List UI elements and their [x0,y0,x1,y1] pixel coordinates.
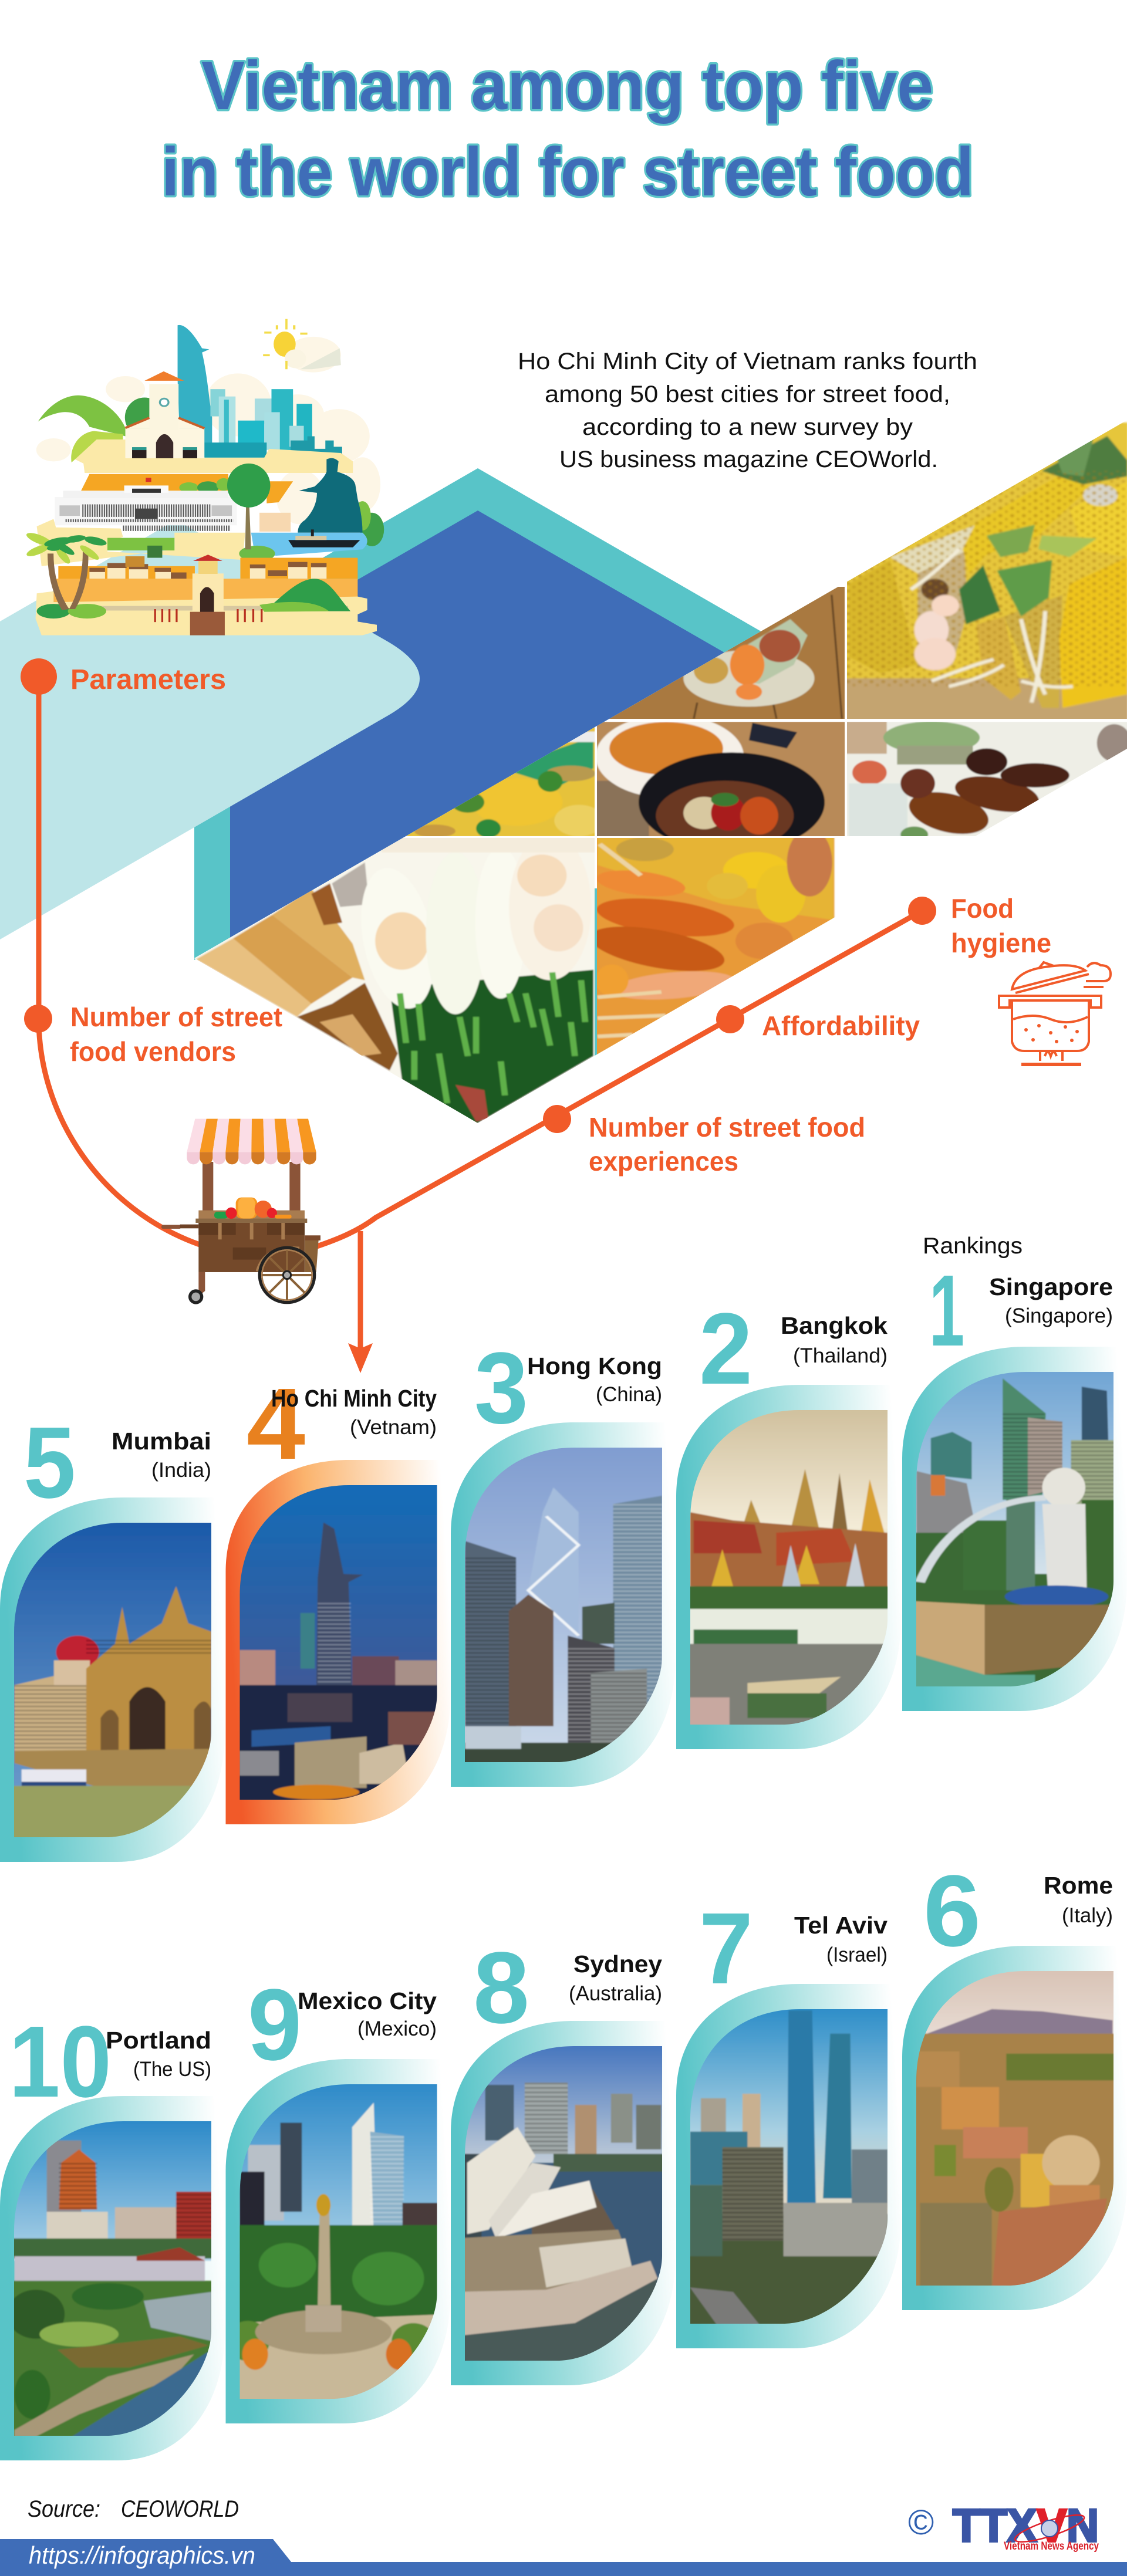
photo: spring rolls on plate [609,587,845,719]
background geometric panel [0,468,763,960]
label: Bangkok [781,1312,888,1339]
label [527,1353,662,1406]
frame and photo [225,2059,451,2423]
logo TTXVN [908,2499,1099,2553]
label: (Mexico) [357,2017,437,2040]
parameter: food hygiene: hygiene [951,928,1051,958]
photo: roast duck [845,721,1127,843]
frame and photo [225,1460,451,1824]
photo: banh xeo [845,422,1127,721]
parameter: vendors: food vendors [70,1036,236,1067]
statue, river and ship [239,458,384,562]
number 9: 9 [248,1968,302,2081]
card 7 Tel Aviv [676,1891,901,2348]
agency wordmark: TTXVN [953,2499,1099,2551]
number 4: 4 [247,1367,305,1480]
intro text: US business magazine CEOWorld. [559,447,938,472]
illustration: Ho Chi Minh City landmarks [25,319,384,635]
label [781,1312,888,1367]
parameter: vendors: Number of street [70,1002,282,1032]
sand band middle [37,519,245,566]
number 10: 10 [9,2004,112,2118]
copyright mark: © [908,2503,934,2542]
parameter: experiences: Number of street food [589,1112,865,1142]
number 8: 8 [473,1931,529,2044]
parameter: food hygiene: Food [951,893,1014,924]
source: Source: [28,2496,100,2522]
number 7: 7 [699,1891,753,2005]
old quarter and citadel wall [53,556,357,602]
title: in the world for street food [161,133,974,210]
timeline path [39,677,922,1353]
label: (Australia) [569,1982,662,2005]
card 9 Mexico City [225,1968,451,2423]
frame and photo [451,2021,676,2385]
label [794,1912,888,1966]
frame and photo [676,1385,901,1749]
sand band lower [36,591,377,635]
number 6: 6 [923,1854,981,1968]
label: (Singapore) [1005,1304,1113,1327]
number 3: 3 [474,1331,528,1445]
icon: cooking pot [999,962,1111,1064]
tagline: Vietnam News Agency [1004,2540,1099,2553]
card 6 Rome [902,1854,1127,2310]
hill and bushes [37,579,350,618]
guards [154,609,262,622]
parameter: Parameters: Parameters [70,664,226,695]
label [106,2027,211,2081]
number 5: 5 [23,1405,76,1519]
rankings heading: Rankings [923,1233,1023,1259]
parameter: Parameters [21,658,226,695]
photo: fried egg dish [406,728,595,836]
citadel gate [190,555,225,635]
independence palace [55,474,293,531]
card 3 Hong Kong [451,1331,676,1787]
icon: street food cart [161,1119,320,1303]
frame and photo [451,1422,676,1787]
card 1 Singapore [902,1253,1127,1711]
photo: grilled skewers [597,838,836,1054]
label [298,1987,437,2040]
label: (Thailand) [793,1344,888,1367]
label: Tel Aviv [794,1912,888,1939]
frame and photo [902,1347,1127,1711]
palms [25,530,107,610]
label: (The US) [133,2058,211,2081]
parameter: food hygiene [908,893,1051,958]
parameter: vendors [24,1002,282,1067]
parameter: affordability: Affordability [762,1010,920,1041]
photo: clay pot [597,722,845,836]
label [569,1950,662,2005]
footer url: https://infographics.vn [29,2541,255,2569]
tree [227,464,270,549]
Ben Thanh market [126,371,204,458]
label [271,1385,437,1439]
intro text: according to a new survey by [582,414,913,440]
card 10 Portland [0,2004,225,2460]
number 1: 1 [929,1253,964,1367]
intro text [518,349,977,472]
label: (India) [151,1459,211,1482]
card 4 Ho Chi Minh City [225,1367,451,1824]
clouds and sun [36,319,380,524]
food photo collage [188,411,1127,1133]
frame and photo [0,1497,225,1862]
title: Vietnam among top five [201,47,933,124]
arrow head [348,1343,373,1373]
label [1044,1872,1113,1927]
label [112,1428,211,1482]
footer bar [0,2539,1127,2576]
label: Hong Kong [527,1353,662,1380]
frame and photo [0,2096,225,2460]
intro text: Ho Chi Minh City of Vietnam ranks fourth [518,349,977,374]
label: Portland [106,2027,211,2054]
card 5 Mumbai [0,1405,225,1862]
skyline [178,325,342,458]
label: (Vetnam) [350,1416,437,1439]
card 2 Bangkok [676,1292,901,1749]
label: Sydney [573,1950,662,1977]
title [161,47,974,210]
card 8 Sydney [451,1931,676,2385]
label: (Israel) [826,1943,888,1966]
globe [1013,2510,1086,2547]
label: (China) [596,1383,662,1406]
source: CEOWORLD [121,2496,239,2522]
label [989,1273,1113,1327]
label: (Italy) [1062,1904,1113,1927]
photo: fresh rolls [188,834,596,1125]
number 2: 2 [699,1292,753,1405]
sand band upper [75,440,353,473]
label: Mexico City [298,1987,437,2014]
frame and photo [676,1984,901,2348]
source [28,2496,239,2522]
label: Mumbai [112,1428,211,1455]
hills [38,395,164,462]
frame and photo [902,1946,1127,2310]
intro text: among 50 best cities for street food, [545,381,950,407]
parameter: experiences [543,1105,865,1177]
label: Rome [1044,1872,1113,1899]
label: Singapore [989,1273,1113,1300]
parameter: affordability [716,1005,920,1041]
parameter: experiences: experiences [589,1146,738,1177]
label: Ho Chi Minh City [271,1385,437,1412]
